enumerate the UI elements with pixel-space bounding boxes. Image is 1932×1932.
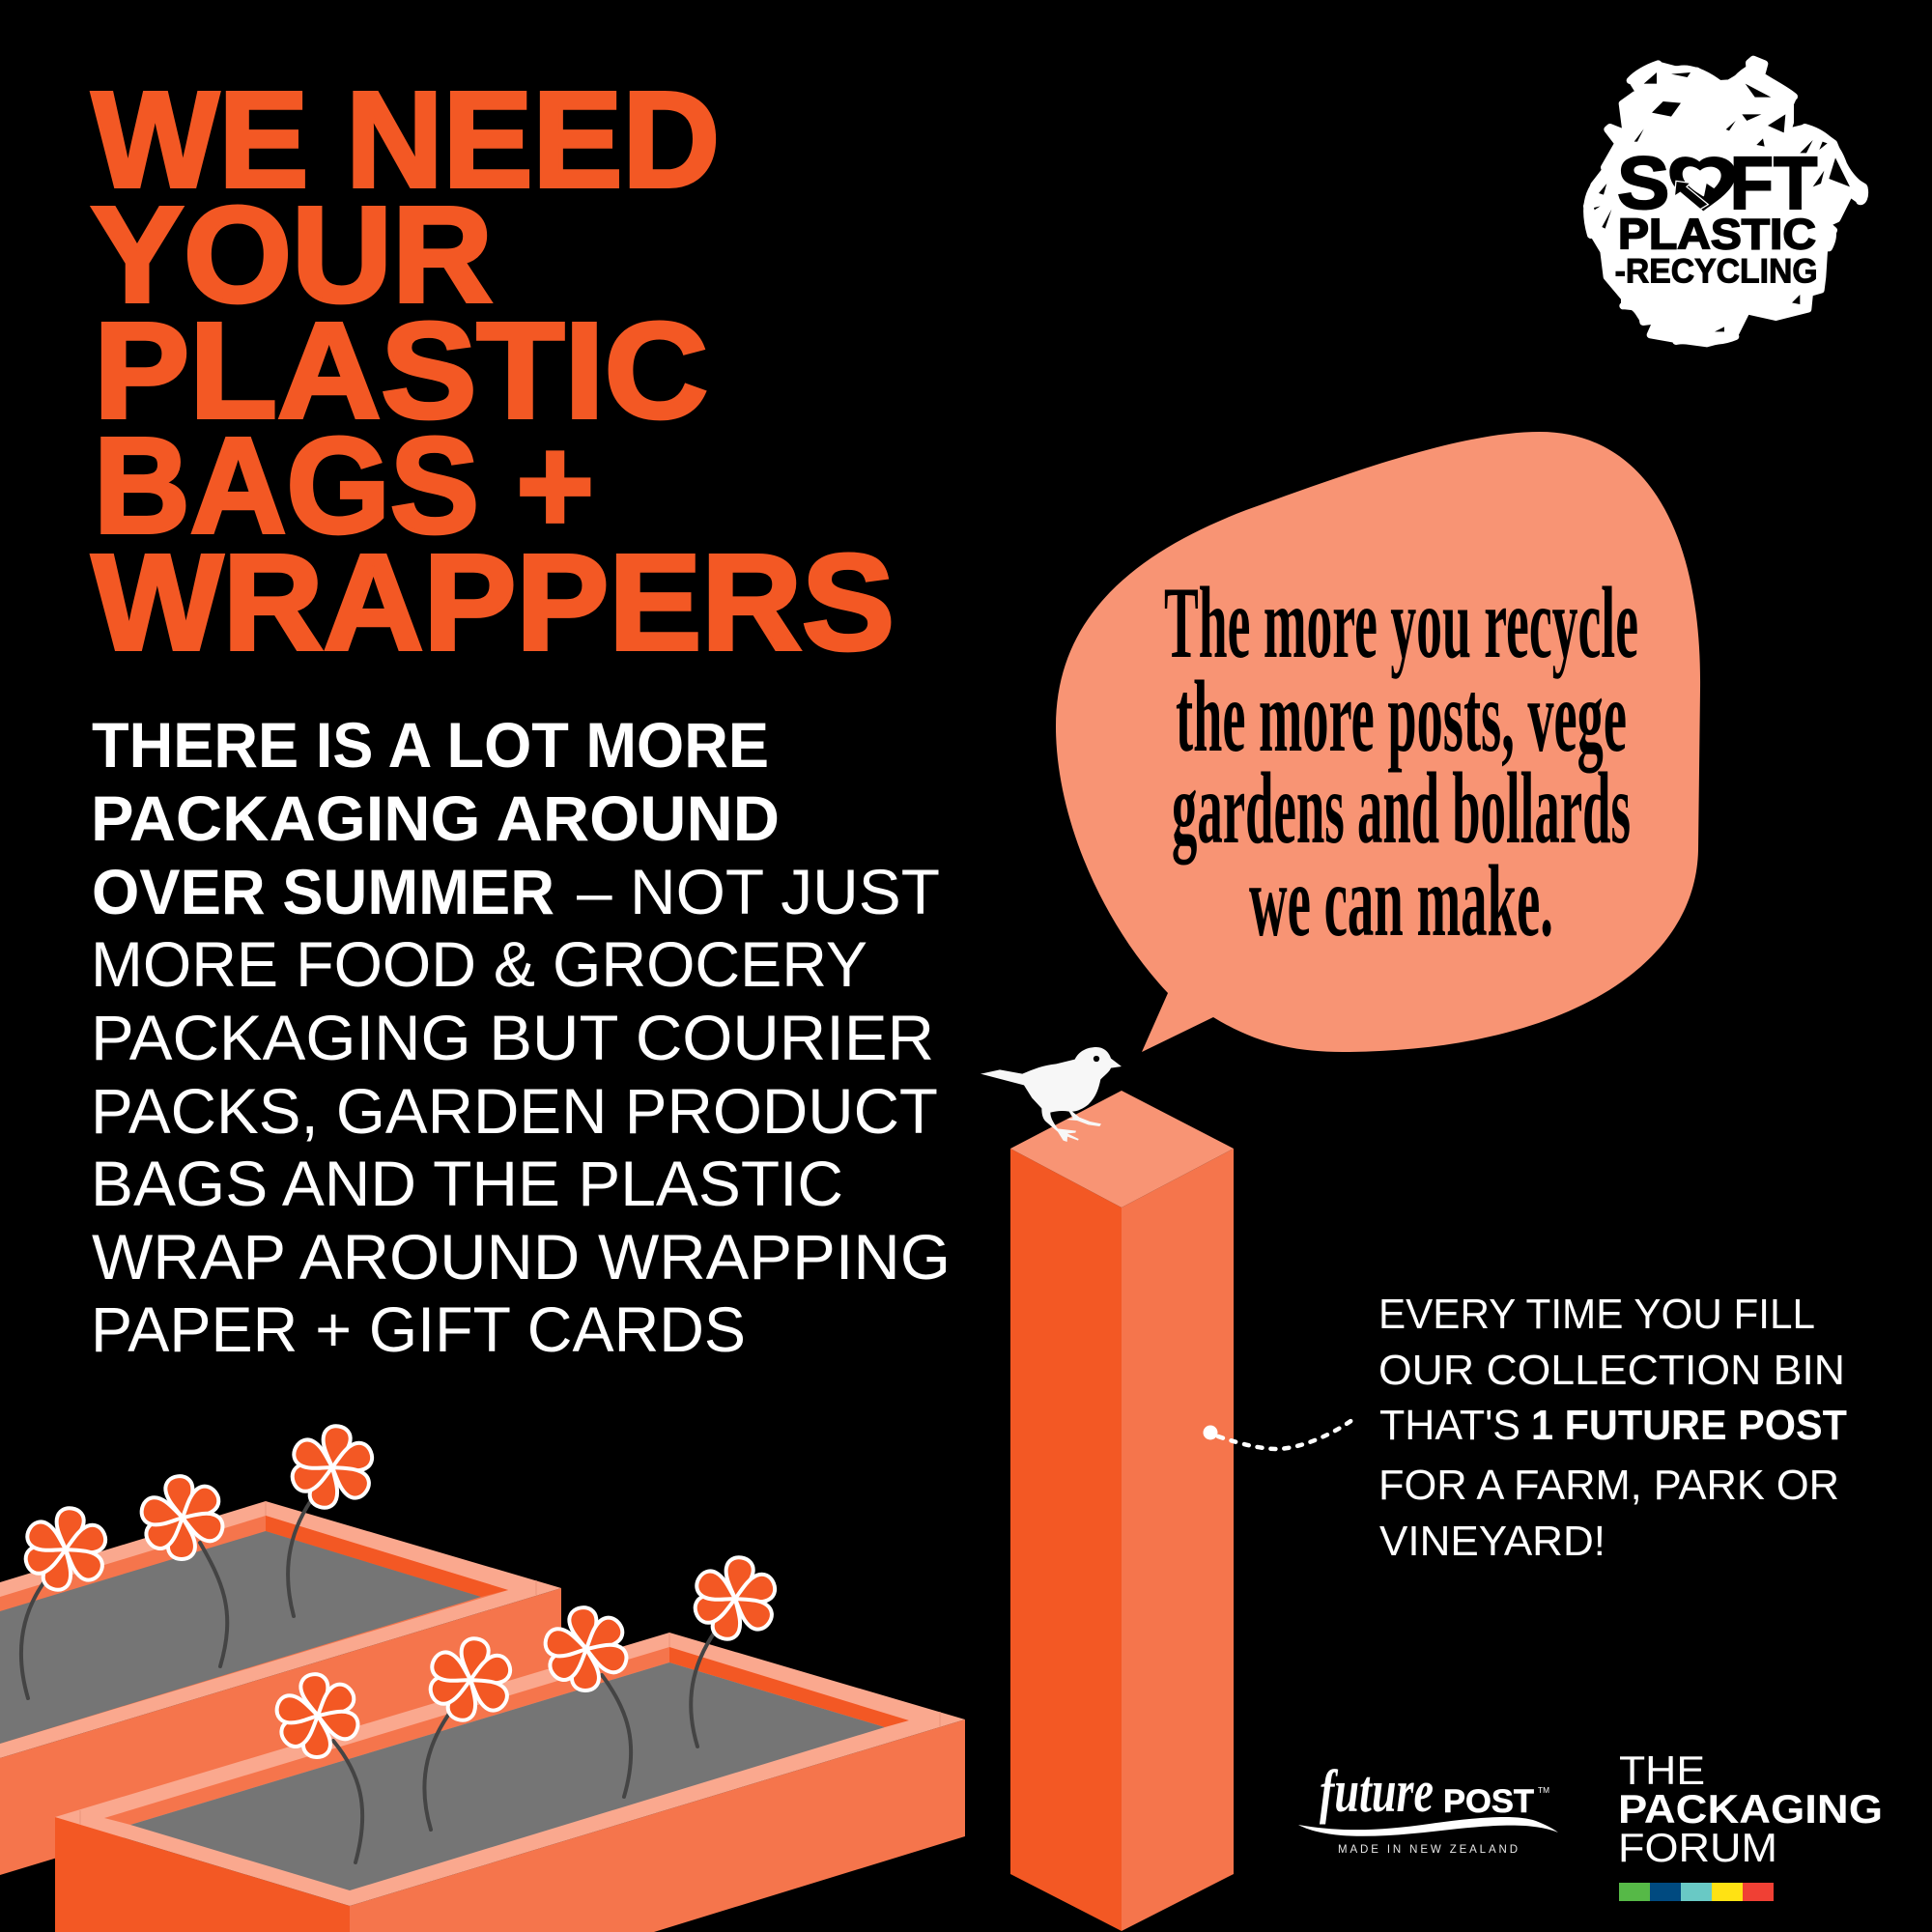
body text: BAGS AND THE PLASTIC xyxy=(91,1148,843,1219)
logo word: PLASTIC: PLASTIC xyxy=(1618,211,1816,258)
body text: WRAP AROUND WRAPPING xyxy=(92,1221,951,1293)
callout connector xyxy=(1204,1416,1357,1449)
callout text: THAT'S xyxy=(1379,1403,1520,1449)
callout text: EVERY TIME YOU FILL xyxy=(1378,1292,1815,1338)
title: PLASTIC xyxy=(94,294,708,446)
logo word: S: S xyxy=(1617,142,1669,225)
scribble loops xyxy=(1587,64,1864,341)
body text: MORE FOOD & GROCERY xyxy=(91,928,867,1000)
callout text: 1 FUTURE POST xyxy=(1531,1403,1847,1449)
body text: PACKAGING BUT COURIER xyxy=(91,1002,934,1073)
logo: the packaging forum: FORUM xyxy=(1618,1825,1777,1870)
logo: the packaging forum xyxy=(1618,1747,1883,1901)
body text: PAPER + GIFT CARDS xyxy=(91,1293,746,1365)
front planter xyxy=(55,1633,965,1932)
flowers xyxy=(15,1419,784,1764)
logo: future post: POST xyxy=(1443,1783,1534,1820)
logo: the packaging forum: PACKAGING xyxy=(1618,1786,1883,1832)
icon: bird xyxy=(980,1047,1122,1142)
logo word: RECYCLING: -RECYCLING xyxy=(1615,253,1818,291)
callout text: OUR COLLECTION BIN xyxy=(1378,1348,1845,1394)
scribble gaps xyxy=(1594,72,1850,331)
logo word: FT: FT xyxy=(1730,142,1817,225)
flower stems xyxy=(21,1493,721,1862)
callout text: VINEYARD! xyxy=(1379,1519,1605,1565)
title: BAGS + xyxy=(94,409,594,561)
speech bubble text: we can make. xyxy=(1249,844,1553,957)
back planter xyxy=(0,1501,561,1875)
colour bar xyxy=(1619,1883,1774,1901)
logo: future post: future xyxy=(1320,1759,1434,1825)
title: WE NEED xyxy=(92,63,720,215)
speech bubble xyxy=(1056,432,1700,1052)
body text xyxy=(91,709,951,1365)
body text: PACKS, GARDEN PRODUCT xyxy=(91,1075,938,1147)
logo: future post: TM xyxy=(1538,1786,1549,1795)
body text: THERE IS A LOT MORE xyxy=(92,709,769,781)
body text: – NOT JUST xyxy=(577,856,940,927)
logo heart xyxy=(1669,156,1736,211)
isometric post xyxy=(1010,1091,1234,1931)
logo: the packaging forum: THE xyxy=(1619,1747,1705,1793)
body text: OVER SUMMER xyxy=(92,856,554,927)
callout text xyxy=(1378,1292,1847,1565)
callout text: FOR A FARM, PARK OR xyxy=(1378,1463,1839,1509)
logo: future post xyxy=(1298,1759,1558,1856)
title: WRAPPERS xyxy=(92,526,895,678)
title: YOUR xyxy=(91,178,493,330)
logo: future post: MADE IN NEW ZEALAND xyxy=(1338,1844,1518,1856)
body text: PACKAGING AROUND xyxy=(91,782,780,854)
logo: soft plastic recycling xyxy=(1587,59,1864,344)
speech bubble text xyxy=(1164,566,1638,957)
title xyxy=(91,63,895,678)
